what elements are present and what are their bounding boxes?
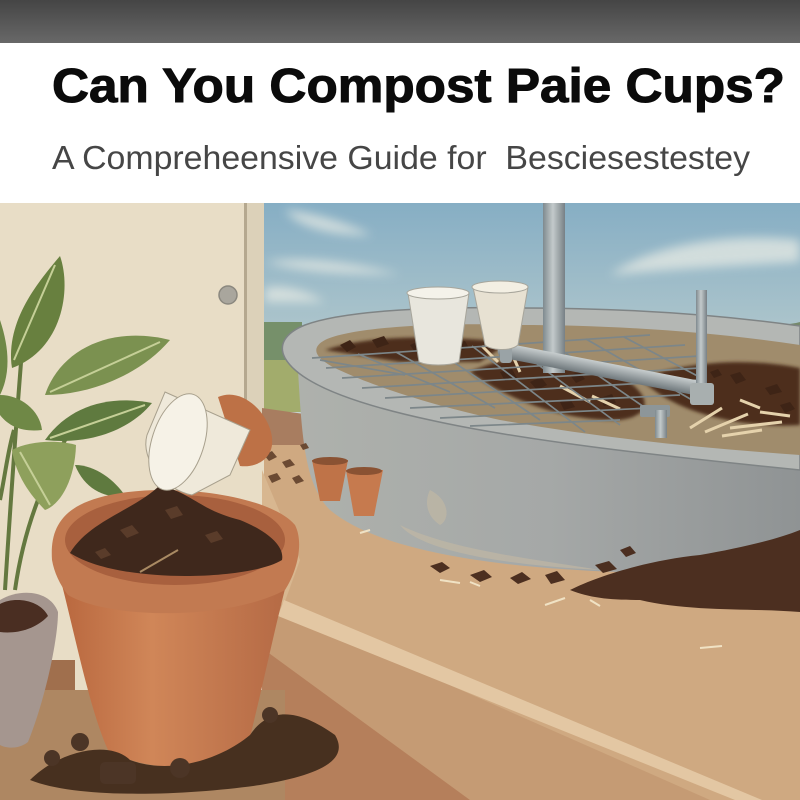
- subtitle: A Compreheensive Guide for Besciesestestey: [52, 139, 751, 176]
- rack pipes: [496, 203, 714, 438]
- soil mound right: [430, 530, 800, 612]
- background: sky and field: [262, 203, 800, 443]
- small terracotta pots: [312, 457, 383, 516]
- door knob: [219, 286, 237, 304]
- indoor floor: [0, 660, 285, 800]
- title panel: [0, 43, 800, 203]
- top dark band: [0, 0, 800, 43]
- compost fill: [316, 324, 800, 455]
- tilted white cup with terracotta pot: [138, 386, 272, 498]
- spilled soil at pot base: [30, 714, 339, 794]
- scattered soil near sill: [264, 443, 309, 484]
- debris on floor: [360, 530, 722, 648]
- metal tub: [282, 308, 800, 572]
- white paper cups in tub: [407, 281, 528, 365]
- sill: [262, 408, 304, 445]
- illustration scene: [0, 203, 800, 800]
- grey plant pot: [0, 593, 58, 748]
- lower step faces: [262, 470, 762, 800]
- wall: [0, 203, 264, 693]
- door frame: [244, 203, 264, 453]
- plant: [0, 256, 170, 590]
- big terracotta pot: [52, 485, 299, 767]
- floor base: [262, 420, 800, 800]
- wire rack: [312, 335, 705, 432]
- soil in pot: [70, 485, 282, 576]
- title: Can You Compost Paie Cups?: [52, 60, 785, 113]
- tub rim: [282, 308, 800, 470]
